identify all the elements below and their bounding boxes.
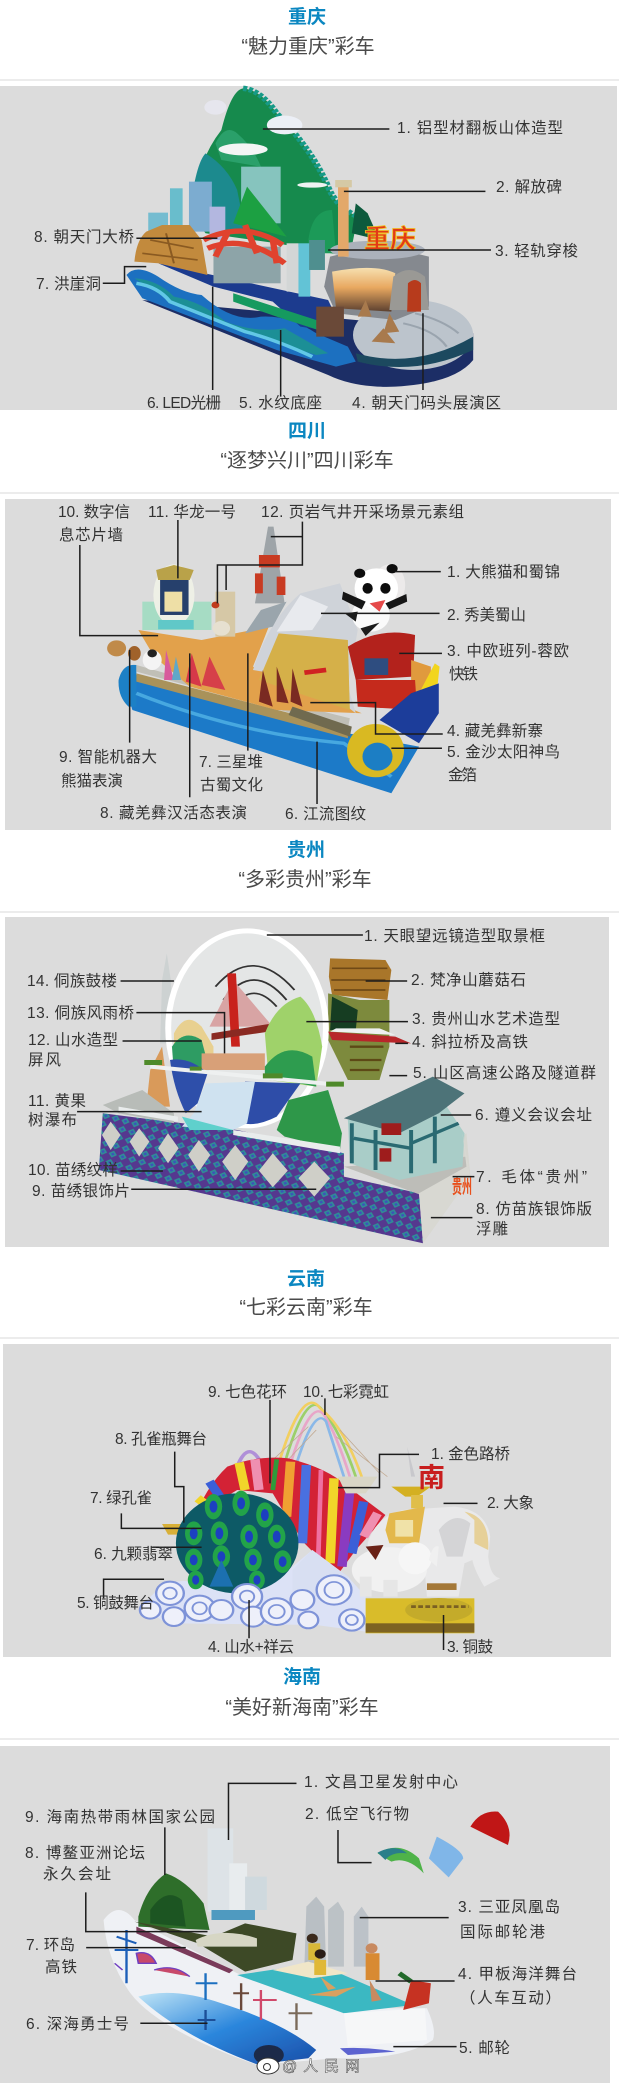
label 4: 4. 朝天门码头展演区 [352, 394, 501, 412]
heading: Guizhou: 贵州 [287, 839, 325, 861]
section: Chongqing [0, 6, 619, 412]
label 4: 4. 甲板海洋舞台 [458, 1965, 577, 1983]
section: Yunnan [0, 1268, 619, 1657]
label 7: 7. 绿孔雀 [90, 1489, 152, 1507]
label 8: 8. 孔雀瓶舞台 [115, 1430, 207, 1448]
leader lines: Yunnan [104, 1398, 478, 1650]
leader lines: Chongqing [103, 129, 491, 397]
label 10: 10. 苗绣纹样 [28, 1161, 118, 1179]
label 4: 4. 斜拉桥及高铁 [412, 1033, 528, 1051]
label 2: 2. 低空飞行物 [305, 1805, 409, 1823]
subtitle: Yunnan float: “七彩云南”彩车 [239, 1296, 373, 1319]
label 12: 12. 页岩气井开采场景元素组 [261, 503, 464, 521]
label 7: 7. 环岛 [26, 1936, 75, 1954]
label 8: 8. 仿苗族银饰版 [476, 1200, 592, 1218]
panel: Chongqing float diagram [0, 86, 617, 410]
subtitle: Sichuan float: “逐梦兴川”四川彩车 [220, 449, 394, 472]
label 1: 1. 大熊猫和蜀锦 [447, 563, 560, 581]
label 2: 2. 秀美蜀山 [447, 606, 526, 624]
label 3: 3. 轻轨穿梭 [495, 242, 578, 260]
heading: Chongqing: 重庆 [288, 6, 326, 28]
label 1: 1. 铝型材翻板山体造型 [397, 119, 563, 137]
heading: Yunnan: 云南 [287, 1268, 325, 1290]
label 14: 14. 侗族鼓楼 [27, 972, 117, 990]
leader lines: Guizhou [77, 935, 474, 1218]
leader lines: Sichuan [80, 520, 443, 804]
illustration: Sichuan float [107, 527, 440, 793]
label 3: 3. 中欧班列-蓉欧 [447, 642, 569, 660]
label 6: 6. 遵义会议会址 [475, 1106, 592, 1124]
label 7: 7. 三星堆 [199, 753, 263, 771]
label 5: 5. 金沙太阳神鸟 [447, 743, 560, 761]
label 3: 快铁 [449, 665, 478, 683]
label 11: 11. 黄果 [28, 1092, 86, 1110]
lettering: Yunnan: 南 [418, 1463, 445, 1493]
label 6: 6. 九颗翡翠 [94, 1545, 173, 1563]
label 1: 1. 天眼望远镜造型取景框 [364, 926, 545, 945]
label 11 [28, 1092, 86, 1129]
subtitle: Hainan float: “美好新海南”彩车 [225, 1696, 379, 1719]
subtitle: Chongqing float: “魅力重庆”彩车 [241, 35, 375, 58]
panel: Sichuan float diagram [5, 499, 611, 830]
label 7 [199, 753, 263, 794]
label 8: 永久会址 [43, 1865, 111, 1883]
label 8: 浮雕 [476, 1220, 508, 1238]
label 8: 8. 博鳌亚洲论坛 [25, 1844, 145, 1862]
illustration: Guizhou float [99, 928, 470, 1243]
label 5: 金箔 [448, 766, 477, 784]
label 8: 8. 朝天门大桥 [34, 228, 134, 246]
label 7: 7. 毛体“贵州” [476, 1168, 587, 1186]
label 3: 3. 三亚凤凰岛 [458, 1898, 560, 1916]
label 9: 熊猫表演 [61, 772, 123, 790]
label 9: 9. 七色花环 [208, 1383, 287, 1401]
label 12: 12. 山水造型 [28, 1031, 118, 1049]
label 5: 5. 山区高速公路及隧道群 [413, 1064, 596, 1082]
label 4: 4. 藏羌彝新寨 [447, 722, 543, 740]
heading: Hainan: 海南 [283, 1666, 321, 1688]
label 9 [59, 748, 157, 790]
label 4: 4. 山水+祥云 [208, 1638, 294, 1656]
leader lines: Hainan [86, 1783, 457, 2047]
label 6: 6. 深海勇士号 [26, 2015, 129, 2033]
panel: Yunnan float diagram [3, 1344, 611, 1657]
label 2: 2. 大象 [487, 1494, 534, 1512]
label 3 [447, 642, 569, 683]
label 12: 屏风 [28, 1052, 61, 1069]
panel: Hainan float diagram [0, 1746, 610, 2083]
label 7: 7. 洪崖洞 [36, 275, 101, 293]
label 3: 3. 铜鼓 [447, 1638, 493, 1656]
illustration: Hainan float [104, 1812, 510, 2065]
label 5: 5. 邮轮 [459, 2039, 510, 2057]
label 5 [447, 743, 560, 784]
label 5: 5. 铜鼓舞台 [77, 1594, 154, 1612]
label 8 [25, 1844, 145, 1883]
label 7 [26, 1936, 77, 1976]
label 7: 高铁 [45, 1958, 77, 1976]
label 5: 5. 水纹底座 [239, 394, 322, 412]
label 2: 2. 解放碑 [496, 178, 562, 196]
label 6: 6. LED光栅 [147, 394, 221, 412]
subtitle: Guizhou float: “多彩贵州”彩车 [238, 868, 372, 891]
label 4 [458, 1965, 577, 2007]
label 6: 6. 江流图纹 [285, 805, 366, 823]
lettering: Guizhou in Mao calligraphy: 贵州 [452, 1176, 472, 1198]
label 9: 9. 智能机器大 [59, 748, 157, 766]
section: Hainan [0, 1666, 619, 2083]
label 10: 10. 七彩霓虹 [303, 1383, 389, 1401]
section: Sichuan [0, 421, 619, 830]
label 10: 息芯片墙 [59, 526, 123, 544]
panel: Guizhou float diagram [5, 917, 609, 1247]
label 11: 树瀑布 [28, 1110, 77, 1129]
watermark: @人民网 [282, 2058, 360, 2075]
label 3: 3. 贵州山水艺术造型 [412, 1010, 560, 1028]
heading: Sichuan: 四川 [288, 421, 326, 442]
label 2: 2. 梵净山蘑菇石 [411, 971, 526, 989]
lettering: Chongqing: 重庆 [364, 224, 416, 254]
label 1: 1. 金色路桥 [431, 1445, 510, 1463]
label 4: （人车互动） [460, 1989, 561, 2007]
label 8: 8. 藏羌彝汉活态表演 [100, 804, 247, 822]
illustration: Yunnan float [140, 1403, 500, 1633]
label 13: 13. 侗族风雨桥 [27, 1004, 134, 1022]
label 7: 古蜀文化 [200, 776, 263, 794]
label 9: 9. 苗绣银饰片 [32, 1182, 130, 1200]
label 9: 9. 海南热带雨林国家公园 [25, 1808, 215, 1826]
label 12 [28, 1031, 118, 1069]
illustration: Chongqing float [126, 88, 473, 387]
section: Guizhou [0, 839, 619, 1247]
label 8 [476, 1200, 592, 1238]
label 3 [458, 1898, 560, 1941]
label 11: 11. 华龙一号 [148, 503, 236, 521]
label 1: 1. 文昌卫星发射中心 [304, 1773, 458, 1791]
label 10: 10. 数字信 [58, 503, 130, 521]
label 10 [58, 503, 130, 544]
label 3: 国际邮轮港 [460, 1923, 545, 1941]
